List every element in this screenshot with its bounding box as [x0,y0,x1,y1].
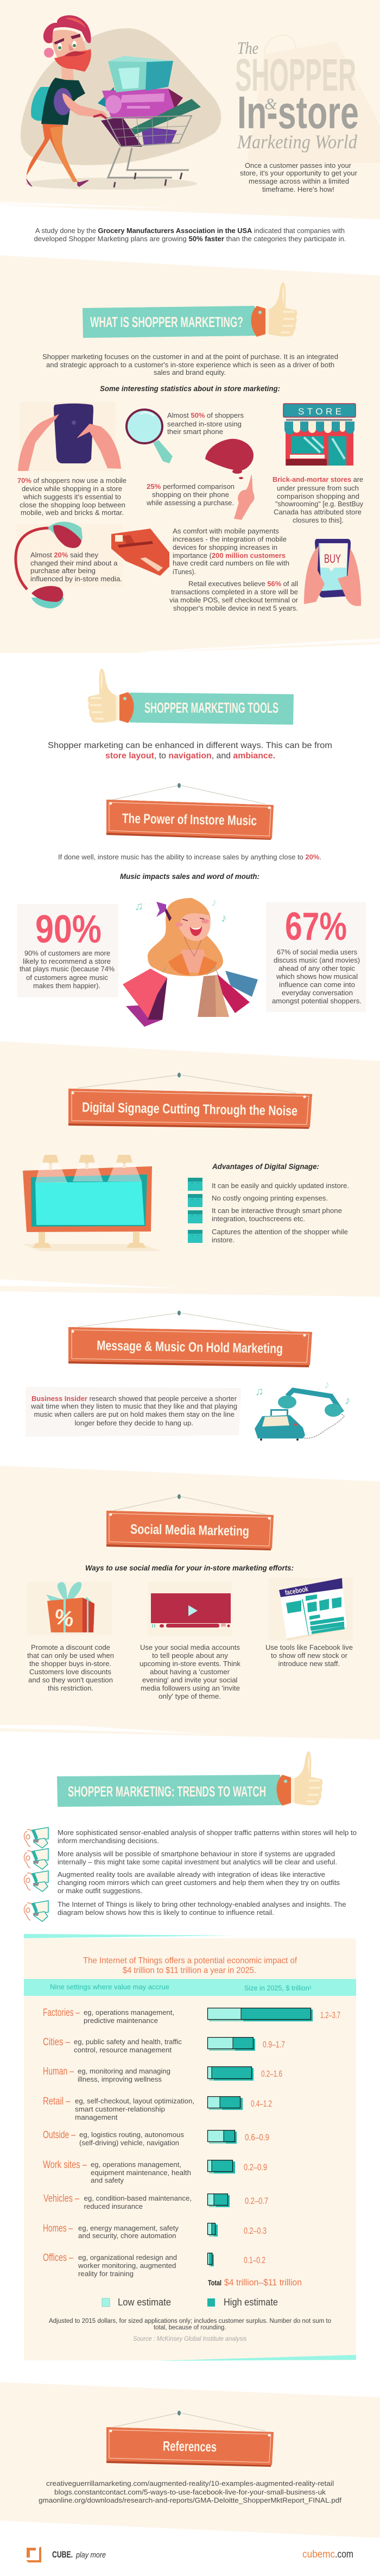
panel: 90% stat: makes them happier). [33,982,100,990]
tools intro text: store layout, to navigation, and ambiance. [105,751,275,761]
boxes in cart [98,56,201,147]
row: offices: Offices – [43,2252,73,2264]
intro text: store, it's your opportunity to get your [240,169,357,177]
row: factories: eg, operations management, [84,2009,174,2016]
row: work sites: Work sites – [43,2159,87,2171]
icon: facebook page: facebook [284,1585,309,1597]
hanging sign: references [106,2411,274,2467]
logo: cube play more: CUBE. [52,2549,73,2560]
music subheading: Music impacts sales and word of mouth: [120,872,259,881]
logo: cube play more: play more [75,2550,106,2560]
panel: social events: to tell people about any [152,1652,229,1660]
row: vehicles [43,2193,268,2210]
panel: 67% stat: which shows how musical [276,973,358,981]
panel: brick and mortar stat: comparison shopping and [277,493,359,500]
row: work sites: and safety [91,2177,124,2184]
icon: video player [151,1593,231,1628]
statistics subheading: Some interesting statistics about in store marketing: [100,384,280,393]
chart legend [102,2297,278,2308]
chart total: $4 trillion–$11 trillion [224,2277,302,2288]
panel: 67% stat: amongst potential shoppers. [272,997,362,1005]
panel: facebook live: introduce new staff. [278,1660,340,1668]
title: & [264,95,277,113]
advantages of digital signage list: instore. [212,1236,235,1244]
title: The [237,38,258,58]
row: factories [43,2007,340,2025]
panel: discount code: Customers love discounts [29,1668,111,1676]
chart legend: High estimate [224,2297,278,2308]
icon: billboard [22,1155,162,1251]
icon: magnifying glass [126,410,173,463]
hero illustration: shopper with cart [21,15,221,190]
row: offices: worker monitoring, augmented [78,2262,176,2270]
shopper marketing definition: and strategic approach to a customer's in-store experience which is seen as a driver of both [46,361,334,369]
chart header bar: Size in 2025, $ trillion¹ [244,1984,312,1992]
study text block: developed Shopper Marketing plans are growing 50% faster than the categories they participate in. [34,235,346,243]
icon: singing girl with shopping bags: ♪ [221,912,227,925]
shopper marketing definition [42,353,338,376]
icon: store front: STORE [298,406,341,417]
website url: .com [335,2549,353,2560]
icon: gift box: % [53,1605,75,1631]
panel: 67% stat: 67% of social media users [277,948,357,956]
title: Marketing World [237,131,358,153]
row: outside: (self-driving) vehicle, navigation [79,2139,179,2147]
row: vehicles: Vehicles – [43,2193,79,2204]
chart footnote: Source : McKinsey Global Institute analysis [133,2336,247,2342]
chart title: The Internet of Things offers a potential economic impact of [83,1956,297,1965]
website url: cubemc [302,2549,335,2560]
panel: discount code: Promote a discount code [31,1644,110,1651]
logo: cube play more [26,2547,106,2562]
hanging sign: the power of instore music: The Power of Instore Music [122,811,257,828]
row: human: eg, monitoring and managing [78,2068,170,2075]
row: factories: Factories – [43,2007,80,2019]
panel: 67% stat: influence can come into [279,981,355,989]
panel: brick and mortar stat [273,404,364,524]
panel: 50% searched stat [126,410,244,463]
heading: what is shopper marketing: WHAT IS SHOPPER MARKETING? [90,314,243,330]
row: human: 0.2–1.6 [261,2069,282,2079]
panel: 56% retail executives stat: transactions completed in a store will be [171,588,298,596]
panel: 20% changed mind stat: Almost 20% said they [30,551,99,559]
panel: brick and mortar stat: "showrooming" [e.g. BestBuy [275,500,364,508]
icon: telephone: ♫ [255,1385,264,1398]
intro text: Once a customer passes into your [245,162,351,169]
trends bullet list: or make outfit suggestions. [58,1887,142,1895]
panel: mobile payments stat: increases - the integration of mobile [173,536,287,543]
panel: social events: only' type of theme. [159,1693,221,1700]
row: retail: 0.4–1.2 [251,2099,272,2109]
panel: brick and mortar stat: Canada has attributed store [274,508,362,516]
row: homes: eg, energy management, safety [78,2225,179,2232]
row: offices [43,2252,265,2278]
panel: discount code: and so they won't question [28,1676,113,1684]
icon: telephone: ♪ [324,1379,330,1391]
panel: 50% searched stat: Almost 50% of shoppers [167,412,244,419]
row: work sites [43,2159,267,2184]
hanging sign: social media marketing: Social Media Marketing [130,1522,249,1539]
trends bullet list: diagram below shows how this is likely to continue to influence retail. [58,1909,274,1917]
heading: shopper marketing tools: SHOPPER MARKETING TOOLS [144,700,278,716]
panel: facebook live: to show off new stock or [271,1652,347,1660]
panel: 20% changed mind stat: influenced by in-store media. [30,575,122,583]
panel: 67% stat: 67% [285,905,347,948]
icon: telephone: ♪ [345,1394,351,1407]
advantages of digital signage list: Captures the attention of the shopper while [212,1228,348,1236]
panel: 90% stat [17,904,118,997]
panel: 67% stat: ahead of any other topic [278,965,355,972]
chart footnote: Adjusted to 2015 dollars, for sized applications only; includes customer surplus. Number do not sum to [49,2318,331,2324]
shopper marketing definition: sales and brand equity. [154,369,226,376]
panel: facebook live [265,1578,353,1668]
trends bullet list [24,1827,357,1921]
row: homes: Homes – [43,2223,73,2234]
panel: social events: Use your social media accounts [140,1644,240,1651]
panel: discount code: the shopper buys in-store. [29,1660,111,1668]
icon: phone with BUY button [304,539,361,606]
chart header bar: Nine settings where value may accrue [50,1983,169,1991]
intro text: timeframe. Here's how! [262,186,334,193]
panel: 56% retail executives stat: shopper's mobile device in next 5 years. [173,605,298,612]
shopper marketing definition: Shopper marketing focuses on the customer in and at the point of purchase. It is an integrated [42,353,338,361]
shopping cart [93,115,192,187]
panel: 70% mobile stat: which suggests it's essential to [23,493,121,501]
panel: social events: media followers using an 'invite [141,1685,240,1692]
panel: internet of things chart [24,1934,356,2361]
hanging sign: social media marketing [106,1494,274,1550]
row: retail: smart customer-relationship [75,2106,165,2113]
panel: 70% mobile stat [17,402,126,517]
study text block: A study done by the Grocery Manufacturers Association in the USA indicated that companies with [35,227,345,235]
hanging sign: message and music on hold: Message & Music On Hold Marketing [97,1338,283,1356]
chart total: Total [208,2278,221,2287]
panel: 90% stat: that plays music (because 74% [20,965,115,973]
panel: 56% retail executives stat [169,580,298,612]
panel: 70% mobile stat: 70% of shoppers now use a mobile [17,477,126,485]
icon: phone with BUY button: BUY [324,552,341,566]
panel: brick and mortar stat: Brick-and-mortar stores are [273,476,363,483]
trends bullet list: inform merchandising decisions. [58,1837,159,1845]
panel: discount code: that can only be used when [27,1652,114,1660]
panel: 90% stat: 90% of customers are more [24,950,110,957]
panel: business insider text: wait time when they listen to music that they like and that playing [30,1403,237,1410]
trends bullet list: More sophisticated sensor-enabled analysis of shopper traffic patterns within stores will help to [58,1829,357,1837]
panel: 56% retail executives stat: Retail executives believe 56% of all [188,580,298,588]
chart legend: Low estimate [118,2297,171,2308]
panel: facebook live: Use tools like Facebook live [265,1644,353,1651]
icon: headphones [16,522,83,608]
icon: store front [283,404,356,466]
trends bullet list: The Internet of Things is likely to bring other technology-enabled analyses and insights. The [58,1901,346,1908]
references list: blogs.constantcontact.com/5-ways-to-use-facebook-live-for-your-small-business-uk [54,2489,326,2496]
intro text [240,162,357,193]
row: retail: eg, self-checkout, layout optimization, [75,2097,194,2105]
trends bullet list: More analysis will be possible of smartphone behaviour in store if systems are upgraded [58,1850,335,1858]
row: cities: Cities – [43,2037,70,2048]
row: factories: 1.2–3.7 [320,2010,340,2020]
panel: social events [140,1582,241,1700]
panel: mobile payments stat: have credit card numbers on file with [173,560,289,567]
references list: creativeguerrillamarketing.com/augmented-reality/10-examples-augmented-reality-retail [46,2480,334,2487]
panel: 50% searched stat: their smart phone [167,428,223,436]
chart header bar [24,1979,356,1996]
hanging sign: references: References [163,2439,217,2455]
icon: gift box [46,1582,94,1632]
row: work sites: eg, operations management, [91,2161,181,2169]
chart title: $4 trillion to $11 trillion a year in 2025. [123,1966,256,1975]
icon: facebook page [279,1578,349,1641]
row: retail [43,2096,272,2121]
panel: discount code: this restriction. [48,1685,93,1692]
hanging sign: digital signage [68,1072,312,1129]
panel: brick and mortar stat: under pressure from such [277,485,359,492]
advantages of digital signage list: It can be interactive through smart phone [212,1207,342,1215]
references list [39,2480,342,2504]
panel: 20% changed mind stat [16,522,123,608]
row: human [43,2066,282,2083]
row: offices: reality for training [78,2270,134,2278]
row: work sites: equipment maintenance, health [91,2169,191,2177]
icon: credit card [111,529,169,576]
tools intro text [48,741,332,761]
row: offices: eg, organizational redesign and [78,2254,177,2261]
row: factories: predictive maintenance [84,2017,158,2025]
advantages of digital signage list: It can be easily and quickly updated instore. [212,1182,349,1190]
row: outside: Outside – [43,2129,75,2141]
row: outside: eg, logistics routing, autonomous [79,2131,184,2139]
row: cities: 0.9–1.7 [263,2039,285,2050]
row: outside [43,2129,269,2147]
icon: phone in hands [18,404,121,471]
row: retail: Retail – [43,2096,71,2107]
panel: mobile payments stat: iTunes). [173,568,196,576]
icon: thought bubble and pointing hand [205,439,255,520]
icon: singing girl with shopping bags: ♪ [211,896,217,909]
advantages of digital signage list: integration, touchscreens etc. [212,1215,305,1223]
row: homes: and security, chore automation [78,2232,176,2240]
panel: 20% changed mind stat: purchase after being [30,567,96,575]
references list: gmaonline.org/downloads/research-and-reports/GMA-Deloitte_ShopperMktReport_FINAL.pdf [39,2497,342,2504]
row: human: Human – [43,2066,74,2077]
panel: 50% searched stat: searched in-store using [167,420,242,428]
hanging sign: message and music on hold [68,1310,312,1367]
row: vehicles: eg, condition-based maintenance, [84,2195,192,2202]
panel: 90% stat: 90% [35,908,102,951]
icon: telephone [255,1379,351,1441]
row: outside: 0.6–0.9 [245,2132,269,2143]
hanging sign: digital signage: Digital Signage Cutting Through the Noise [82,1100,297,1119]
panel: 70% mobile stat: mobile, web and bricks & mortar. [21,509,124,517]
panel: 56% retail executives stat: via mobile POS, self checkout terminal or [169,596,298,604]
row: homes [43,2223,267,2240]
panel: social events: about having a 'customer [150,1668,230,1676]
trends bullet list: changing room mirrors which can greet customers and help them when they try on outfits [58,1879,340,1887]
panel: 70% mobile stat: close the shopping loop between [20,501,125,509]
row: human: illness, improving wellness [78,2076,162,2083]
panel: 90% stat: likely to recommend a store [23,958,111,965]
tools intro text: Shopper marketing can be enhanced in different ways. This can be from [48,741,332,750]
shopper figure [26,15,107,187]
panel: 25% comparison stat: shopping on their phone [152,491,229,499]
music sales text: If done well, instore music has the ability to increase sales by anything close to 20%. [58,853,321,861]
panel: 25% comparison stat: 25% performed comparison [147,483,235,491]
panel: brick and mortar stat: closures to this]. [293,517,344,524]
row: cities: control, resource management [74,2046,172,2054]
heading: shopper marketing tools [88,669,294,725]
trends bullet list: internally – this might take some capital investment but analytics will be clear and useful. [58,1858,337,1866]
panel: social events: evening' and invite your social [142,1676,238,1684]
chart footnote: total, because of rounding. [154,2324,226,2331]
heading: trends to watch [57,1751,322,1807]
row: vehicles: 0.2–0.7 [245,2196,268,2206]
advantages of digital signage list [188,1162,349,1244]
panel: 20% changed mind stat: changed their mind about a [30,560,118,567]
panel: social events: upcoming in-store events. Think [140,1660,241,1668]
panel: 90% stat: of customers agree music [26,974,108,982]
panel: 25% comparison stat [146,439,255,520]
panel: 67% stat [266,902,366,1012]
panel: business insider text: longer before they decide to hang up. [75,1419,193,1427]
heading: what is shopper marketing [83,282,297,338]
icon: singing girl with shopping bags: ♫ [135,900,143,913]
trends bullet list: Augmented reality tools are available already with integration of ideas like interactive [58,1871,325,1878]
advantages of digital signage list: Advantages of Digital Signage: [212,1162,319,1171]
row: retail: management [75,2114,118,2121]
heading: trends to watch: SHOPPER MARKETING: TRENDS TO WATCH [68,1783,266,1800]
row: cities: eg, public safety and health, traffic [74,2038,182,2046]
social media subheading: Ways to use social media for your in-store marketing efforts: [85,1563,294,1572]
panel: mobile payments stat: devices for shopping increases in [173,544,277,551]
row: vehicles: reduced insurance [84,2203,143,2210]
intro text: message across within a limited [249,178,349,185]
panel: 25% comparison stat: while assessing a purchase. [146,499,234,507]
row: work sites: 0.2–0.9 [244,2162,267,2172]
panel: business insider text [26,1387,241,1437]
row: homes: 0.2–0.3 [244,2226,267,2236]
panel: 67% stat: discuss music (and movies) [274,957,360,964]
panel: mobile payments stat: importance (200 million customers [173,552,286,560]
panel: discount code [27,1582,114,1692]
panel: 67% stat: everyday conversation [282,989,353,997]
advantages of digital signage list: No costly ongoing printing expenses. [212,1195,328,1202]
chart footnote [49,2318,331,2342]
row: offices: 0.1–0.2 [244,2255,265,2265]
chart title [83,1956,297,1975]
panel: mobile payments stat: As comfort with mobile payments [173,527,279,535]
panel: 70% mobile stat: device while shopping in a store [22,485,122,493]
panel: business insider text: Business Insider research showed that people perceive a shorter [31,1395,237,1403]
study text block [34,227,346,243]
icon: singing girl with shopping bags [123,896,258,1027]
panel: business insider text: music when callers are put on hold makes them stay on the line [34,1411,235,1418]
title [235,35,380,163]
panel: mobile payments stat [111,527,289,576]
hanging sign: the power of instore music [106,783,274,840]
row: cities [43,2037,285,2054]
